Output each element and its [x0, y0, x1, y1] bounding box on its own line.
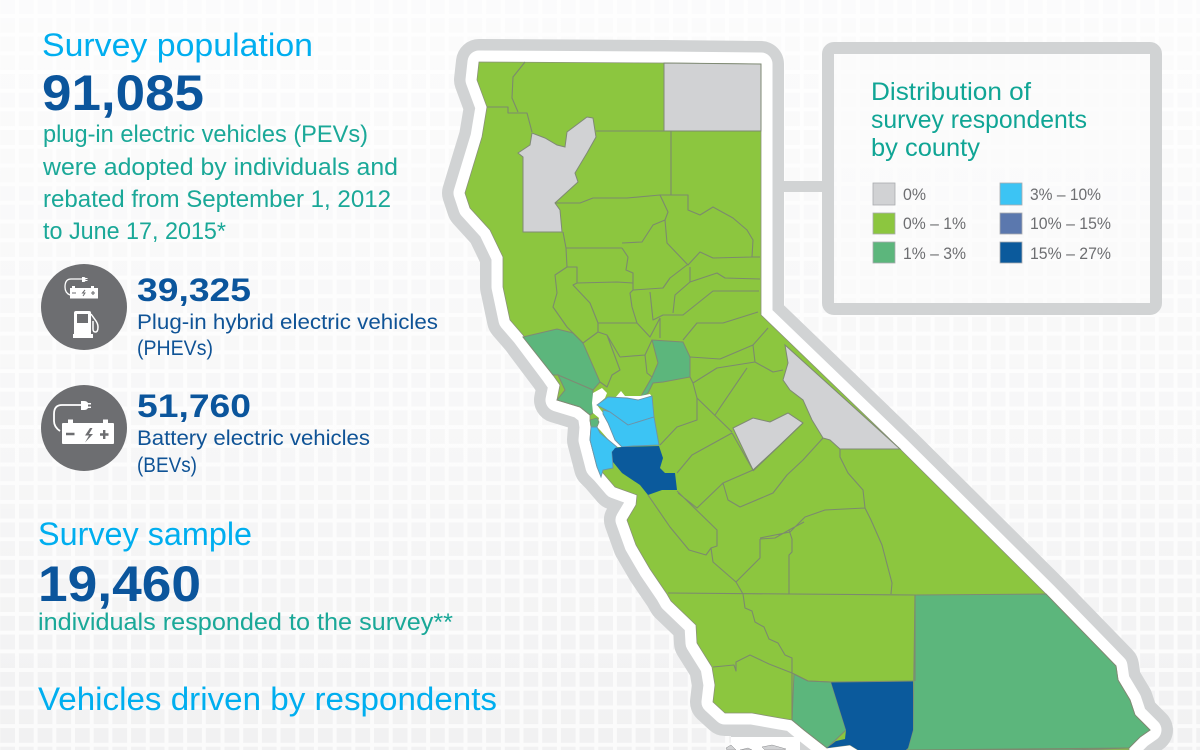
legend title [871, 78, 1087, 162]
legend swatches and labels: 15% – 27% [1030, 245, 1111, 263]
channel islands [726, 745, 786, 750]
legend swatches and labels [873, 183, 1111, 263]
legend swatches and labels: 1% – 3% [903, 245, 966, 263]
number: 91,085: 91,085 [42, 65, 204, 121]
counties: 3% to 10% light blue [590, 396, 659, 477]
map base: green counties [465, 62, 1150, 750]
legend swatches and labels: 3% – 10% [1030, 186, 1101, 204]
legend swatches and labels: 0% – 1% [903, 215, 966, 233]
heading: vehicles driven: Vehicles driven by respondents [38, 681, 497, 717]
panel: legend [828, 48, 1156, 309]
icon: plug-in hybrid battery and fuel pump [41, 264, 127, 350]
number: 19,460: 19,460 [38, 556, 201, 612]
text block: PHEV label [137, 311, 438, 360]
text block: sample description: individuals responded to the survey** [38, 609, 453, 636]
legend title: survey respondents [871, 106, 1087, 134]
number: 39,325: 39,325 [137, 272, 251, 308]
text block: population description: were adopted by individuals and [42, 154, 398, 181]
text block: BEV label: Battery electric vehicles [137, 427, 370, 450]
text block: PHEV label: (PHEVs) [137, 337, 213, 360]
text block: BEV label: (BEVs) [137, 454, 197, 477]
bay water [592, 388, 652, 447]
text block: PHEV label: Plug-in hybrid electric vehicles [137, 311, 438, 334]
text block: population description [42, 121, 398, 245]
text block: population description: plug-in electric vehicles (PEVs) [43, 121, 368, 148]
map halo [465, 62, 1150, 750]
text block: population description: rebated from September 1, 2012 [43, 186, 391, 213]
legend title: by county [871, 134, 981, 162]
text block: population description: to June 17, 2015* [43, 218, 226, 245]
connector: map to legend [775, 181, 830, 192]
county borders [487, 62, 1129, 750]
legend swatches and labels: 0% [903, 186, 926, 204]
legend title: Distribution of [871, 78, 1031, 106]
map: California counties by respondent share [465, 62, 1150, 750]
heading: survey population: Survey population [42, 27, 313, 63]
counties: 0% gray [518, 63, 900, 470]
icon: battery electric [41, 385, 127, 471]
counties: 1% to 3% teal [523, 329, 1150, 750]
number: 51,760: 51,760 [137, 388, 251, 424]
text block: BEV label [137, 427, 370, 477]
county: San Francisco [590, 418, 599, 427]
counties: 15% to 27% dark blue [612, 446, 913, 750]
heading: survey sample: Survey sample [38, 516, 252, 552]
legend swatches and labels: 10% – 15% [1030, 215, 1111, 233]
